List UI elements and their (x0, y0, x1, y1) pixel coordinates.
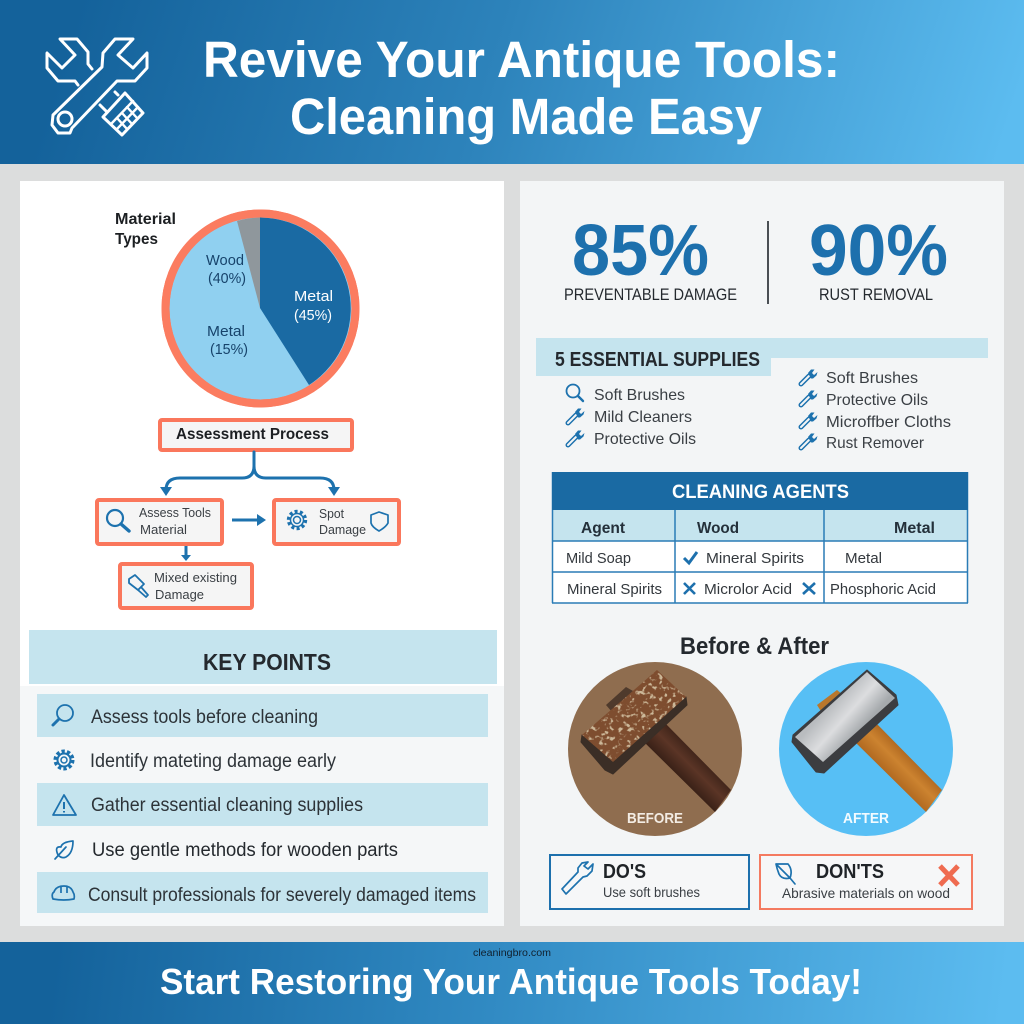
flow heading box: Assessment Process (176, 426, 329, 443)
table row: mineral spirits: Phosphoric Acid (830, 581, 936, 598)
callout: don'ts (760, 855, 972, 909)
supplies list: right: Protective Oils (826, 392, 928, 409)
key point 5: Consult professionals for severely damaged items (88, 885, 476, 906)
flow heading box (160, 420, 352, 450)
title (203, 31, 840, 145)
chart label continued: Types (115, 231, 158, 248)
step: spot damage (274, 500, 399, 544)
supplies heading band (536, 338, 988, 376)
arrow: to spot damage (232, 514, 266, 526)
key point 3: Gather essential cleaning supplies (91, 795, 363, 816)
pie chart: material types (166, 214, 356, 404)
image: after hammer (779, 662, 953, 836)
stat: 85% preventable damage: PREVENTABLE DAMAGE (564, 285, 737, 304)
chart label: material types: Material (115, 211, 176, 228)
panel: left column (20, 181, 504, 926)
stat: 90% rust removal: 90% (809, 211, 948, 291)
supplies list: right (801, 370, 951, 452)
key point 4: Use gentle methods for wooden parts (92, 840, 398, 861)
table row: mineral spirits: Microlor Acid (704, 581, 792, 598)
pie chart: material types: Metal (294, 288, 333, 305)
image: after hammer: AFTER (843, 810, 889, 827)
column headings (581, 520, 935, 537)
key points heading (29, 630, 497, 684)
before and after heading: Before & After (680, 633, 829, 660)
arrows: branching connector (160, 452, 340, 496)
column headings: Agent (581, 520, 626, 537)
pie chart: material types: (15%) (210, 341, 248, 358)
image: before hammer: BEFORE (627, 810, 683, 827)
step: assess tools material: Material (140, 522, 187, 537)
table row: mild soap (566, 550, 882, 567)
watermark: cleaningbro.com (473, 948, 551, 959)
step: mixed existing damage (120, 564, 252, 608)
flowchart: assessment process (97, 420, 399, 608)
callout: do's: DO'S (603, 861, 646, 883)
key point 1 (37, 694, 488, 737)
supplies heading band: 5 ESSENTIAL SUPPLIES (555, 349, 760, 371)
callout: don'ts: DON'TS (816, 861, 884, 883)
supplies list: left (566, 384, 696, 448)
key points heading: KEY POINTS (203, 649, 331, 675)
step: spot damage: Damage (319, 522, 366, 537)
supplies list: right: Microffber Cloths (826, 414, 951, 431)
title: Cleaning Made Easy (290, 88, 763, 145)
key point 3 (37, 783, 488, 826)
icon: crossed wrenches and brush (47, 39, 147, 135)
supplies list: right: Soft Brushes (826, 370, 918, 387)
supplies list: left: Protective Oils (594, 431, 696, 448)
supplies section (536, 338, 988, 452)
column headings: Metal (894, 520, 935, 537)
column headings: Wood (697, 520, 739, 537)
title: Revive Your Antique Tools: (203, 31, 840, 88)
callout: do's: Use soft brushes (603, 884, 700, 900)
table header: CLEANING AGENTS (672, 482, 849, 503)
table: cleaning agents (552, 472, 968, 603)
arrow: down to mixed damage (181, 546, 191, 561)
header banner (0, 0, 1024, 164)
pie chart: material types: (40%) (208, 270, 246, 287)
supplies list: left: Mild Cleaners (594, 409, 692, 426)
step: mixed existing damage: Mixed existing (154, 570, 237, 585)
key point 2: Identify mateting damage early (90, 751, 336, 772)
supplies list: right: Rust Remover (826, 435, 925, 452)
table header (552, 472, 968, 510)
table row: mild soap: Mineral Spirits (706, 550, 804, 567)
pie chart: material types: Metal (207, 323, 245, 340)
pie chart: material types: Wood (206, 252, 244, 269)
footer banner (0, 942, 1024, 1024)
step: assess tools material: Assess Tools (139, 505, 211, 520)
table row: mineral spirits (567, 581, 936, 598)
callout: do's (550, 855, 749, 909)
pie chart: material types: (45%) (294, 307, 332, 324)
stat: 90% rust removal: RUST REMOVAL (819, 285, 933, 304)
callout: don'ts: Abrasive materials on wood (782, 885, 950, 901)
table row: mild soap: Mild Soap (566, 550, 631, 567)
table row: mineral spirits: Mineral Spirits (567, 581, 662, 598)
panel: right column (520, 181, 1004, 926)
step: spot damage: Spot (319, 506, 344, 521)
step: assess tools material (97, 500, 222, 544)
table row: mild soap: Metal (845, 550, 882, 567)
stat divider (767, 221, 769, 304)
supplies list: left: Soft Brushes (594, 387, 685, 404)
footer call to action: Start Restoring Your Antique Tools Today! (160, 961, 862, 1002)
key point 5 (37, 872, 488, 913)
step: mixed existing damage: Damage (155, 587, 204, 602)
stat: 85% preventable damage: 85% (572, 211, 709, 291)
image: before hammer (568, 662, 742, 836)
key point 1: Assess tools before cleaning (91, 707, 318, 728)
